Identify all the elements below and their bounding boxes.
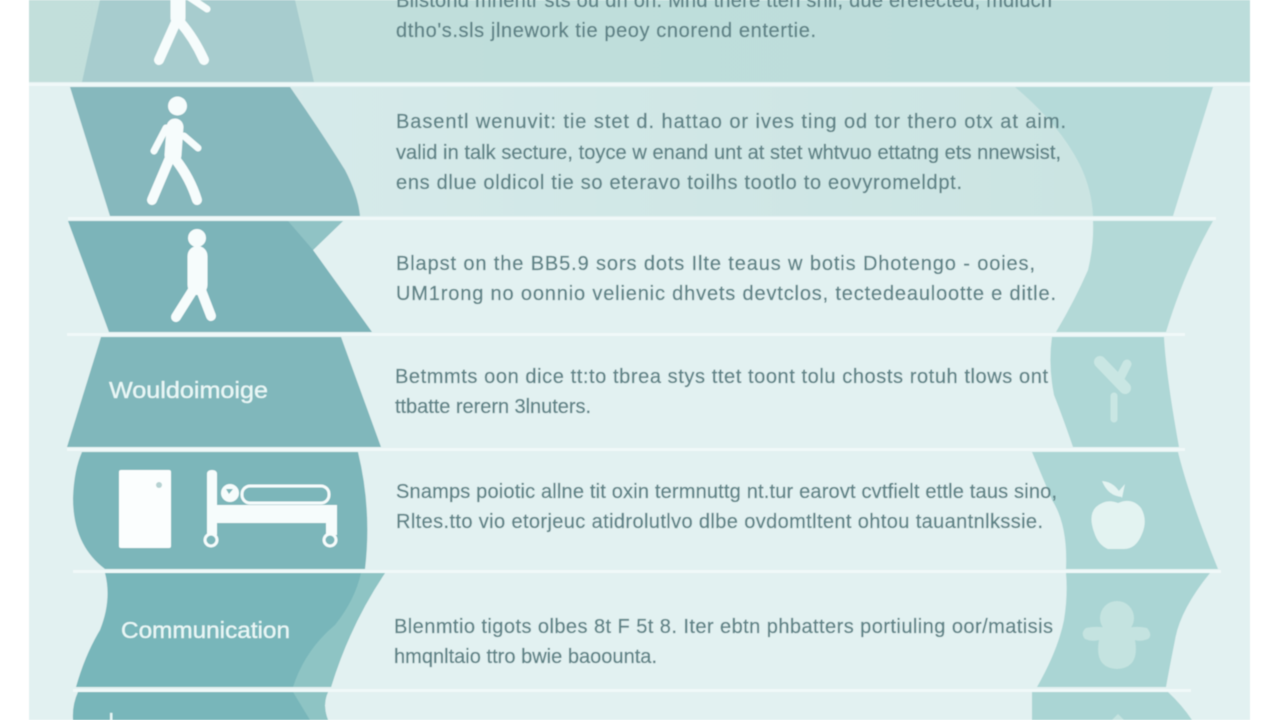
left banner: row 4 xyxy=(73,452,367,569)
left banner: row 6 xyxy=(73,692,328,720)
icon: walking figure, top row xyxy=(159,0,207,60)
text: row 2 description: UM1rong no oonnio velienic dhvets devtclos, tectedeaulootte e ditle. xyxy=(396,283,1056,305)
text: top row description: dtho's.sls jlnework tie peoy cnorend entertie. xyxy=(396,20,816,42)
left banner highlight: row 2 xyxy=(288,221,343,250)
right banner: row 4 xyxy=(1032,452,1218,569)
label: row 3 heading: Wouldoimoige xyxy=(109,377,268,403)
text: row 5 description xyxy=(394,616,1053,668)
text: row 3 description: ttbatte rerern 3lnuters. xyxy=(395,396,591,418)
right banner: row 5 xyxy=(1037,573,1210,687)
label: row 5 heading: Communication xyxy=(121,617,290,643)
text: top row description xyxy=(396,0,1052,42)
left banner: row 2 xyxy=(68,221,372,332)
text: row 1 description: valid in talk secture, toyce w enand unt at stet whtvuo ettatng ets nnewsist, xyxy=(396,142,1061,164)
text: row 1 description: ens dlue oldicol tie so eteravo toilhs tootlo to eovyromeldpt. xyxy=(396,172,962,194)
left banner highlight: row 6 xyxy=(293,692,328,720)
text: row 5 description: Blenmtio tigots olbes 8t F 5t 8. Iter ebtn phbatters portiuling oor/matisis xyxy=(394,616,1053,638)
left banner: row 3 xyxy=(67,337,381,447)
icon: row 6 partial xyxy=(1112,714,1124,720)
left banner: top row xyxy=(82,0,314,82)
left banner: row 1 xyxy=(70,87,360,216)
panel: row 2 xyxy=(68,221,1213,332)
panel: row 4 xyxy=(73,452,1218,569)
right banner: row 6 xyxy=(1032,692,1192,720)
icon: cross, row 3 xyxy=(1100,362,1127,419)
text: row 1 description: Basentl wenuvit: tie stet d. hattao or ives ting od tor thero otx at aim. xyxy=(396,111,1066,133)
panel: row 5 xyxy=(76,573,1210,687)
left banner: row 5 xyxy=(76,573,385,687)
icon: apple xyxy=(1091,481,1145,549)
right banner: row 3 xyxy=(1050,337,1179,447)
icon: walking figure, row 1 xyxy=(152,96,198,200)
text: row 4 description xyxy=(396,481,1057,533)
icon: hospital bed xyxy=(205,470,337,546)
icon: baby figure xyxy=(1083,601,1150,669)
text: row 2 description: Blapst on the BB5.9 sors dots Ilte teaus w botis Dhotengo - ooies, xyxy=(396,253,1035,275)
panel: top row xyxy=(29,0,1250,82)
icon: standing figure, row 2 xyxy=(176,229,211,317)
right banner: row 2 xyxy=(1056,221,1213,332)
left banner highlight: row 5 xyxy=(293,573,385,687)
text: row 1 description xyxy=(396,111,1066,194)
text: row 2 description xyxy=(396,253,1056,305)
text: row 4 description: Rltes.tto vio etorjeuc atidrolutlvo dlbe ovdomtltent ohtou tauantnlkssie. xyxy=(396,511,1043,533)
text: row 5 description: hmqnltaio ttro bwie baoounta. xyxy=(394,646,657,668)
icon: door xyxy=(119,470,171,548)
text: row 4 description: Snamps poiotic allne tit oxin termnuttg nt.tur earovt cvtfielt ettle taus sino, xyxy=(396,481,1057,503)
right banner: row 1 xyxy=(1015,87,1213,216)
panel: row 1 xyxy=(70,87,1213,216)
panel: row 3 xyxy=(67,337,1179,447)
text: row 3 description xyxy=(395,366,1048,418)
panel: row 6 xyxy=(73,692,1192,720)
text: row 3 description: Betmmts oon dice tt:to tbrea stys ttet toont tolu chosts rotuh tlows ont xyxy=(395,366,1048,388)
